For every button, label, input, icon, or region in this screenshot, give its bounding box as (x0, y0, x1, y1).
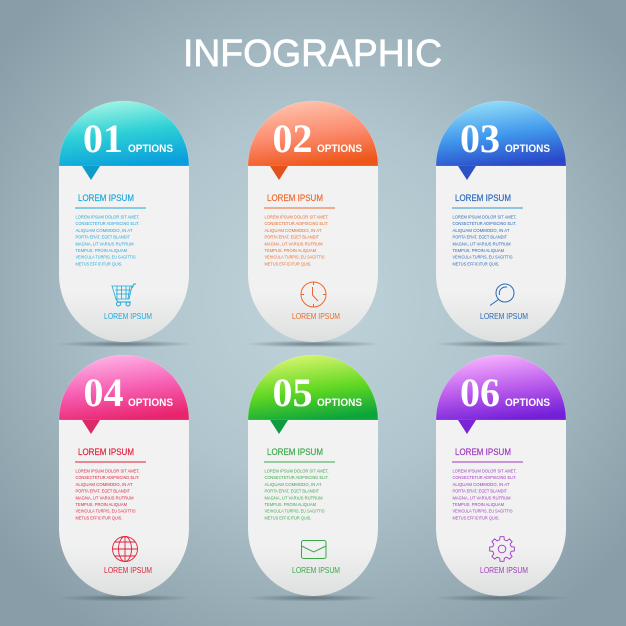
text block 06 (452, 468, 516, 520)
text block 01: METUS EFFICITUR QUIS. (76, 261, 122, 266)
title: INFOGRAPHIC (183, 33, 442, 75)
icon: clock (301, 282, 326, 307)
number 03: 03 (460, 116, 500, 161)
text block 01: LOREM IPSUM DOLOR SIT AMET, (76, 214, 140, 220)
text block 03 (452, 214, 516, 266)
pointer 04 (82, 420, 100, 434)
header 03 (436, 101, 566, 166)
text block 04: VEHICULA TURPIS, EU SAGITTIS (76, 509, 136, 514)
text block 03: TEMPUS. PROIN ALIQUAM (452, 248, 504, 253)
text block 04: ALIQUAM COMMODO, IN AT (76, 482, 133, 487)
header 04 (59, 355, 189, 420)
header 05 (248, 355, 378, 420)
panel: option 06 (433, 355, 569, 602)
heading 03: LOREM IPSUM (455, 193, 511, 204)
text block 02 (264, 214, 328, 266)
text block 02: TEMPUS. PROIN ALIQUAM (264, 248, 316, 253)
text block 06: VEHICULA TURPIS, EU SAGITTIS (452, 509, 512, 514)
text block 01: MAGNA, UT VARIUS RUTRUM (76, 241, 134, 246)
heading 02: LOREM IPSUM (267, 193, 323, 204)
panel: option 01 (56, 101, 192, 348)
text block 05: VEHICULA TURPIS, EU SAGITTIS (264, 509, 324, 514)
icon: shopping cart (112, 284, 136, 306)
text block 05 (264, 468, 328, 520)
text block 02: METUS EFFICITUR QUIS. (264, 261, 312, 266)
text block 06: TEMPUS. PROIN ALIQUAM (452, 502, 504, 507)
heading 06: LOREM IPSUM (455, 447, 511, 458)
panel: option 04 (56, 355, 192, 602)
text block 03: METUS EFFICITUR QUIS. (452, 261, 500, 266)
bottom label 05: LOREM IPSUM (292, 565, 340, 575)
text block 06: CONSECTETUR ADIPISCING ELIT. (452, 475, 516, 480)
panel: option 02 (245, 101, 381, 348)
number 04: 04 (84, 370, 124, 415)
text block 06: METUS EFFICITUR QUIS. (452, 515, 500, 520)
options label 02: OPTIONS (317, 143, 362, 155)
heading 04: LOREM IPSUM (78, 447, 134, 458)
text block 03: CONSECTETUR ADIPISCING ELIT. (452, 221, 516, 226)
text block 05: METUS EFFICITUR QUIS. (264, 515, 312, 520)
pointer 02 (270, 166, 288, 180)
text block 04: CONSECTETUR ADIPISCING ELIT. (76, 475, 140, 480)
number 01: 01 (83, 116, 123, 161)
text block 01: VEHICULA TURPIS, EU SAGITTIS (76, 255, 136, 260)
pointer 06 (458, 420, 476, 434)
text block 03: VEHICULA TURPIS, EU SAGITTIS (452, 255, 512, 260)
number 05: 05 (272, 370, 312, 415)
pointer 05 (270, 420, 288, 434)
icon: globe (112, 536, 138, 562)
pointer 01 (82, 166, 100, 180)
icon: gear (490, 537, 514, 561)
text block 02: VEHICULA TURPIS, EU SAGITTIS (264, 255, 324, 260)
bottom label 02: LOREM IPSUM (292, 311, 340, 321)
bottom label 06: LOREM IPSUM (480, 565, 528, 575)
heading 05: LOREM IPSUM (267, 447, 323, 458)
text block 06: ALIQUAM COMMODO, IN AT (452, 482, 510, 487)
text block 06: MAGNA, UT VARIUS RUTRUM (452, 495, 511, 500)
options label 05: OPTIONS (317, 397, 362, 409)
number 06: 06 (460, 370, 500, 415)
text block 04: LOREM IPSUM DOLOR SIT AMET, (76, 468, 140, 474)
text block 05: PORTA ERAT, EGET BLANDIT (264, 489, 319, 494)
header 02 (248, 101, 378, 166)
text block 05: MAGNA, UT VARIUS RUTRUM (264, 495, 323, 500)
pointer 03 (458, 166, 476, 180)
text block 01: CONSECTETUR ADIPISCING ELIT. (76, 221, 140, 226)
header 06 (436, 355, 566, 420)
text block 03: ALIQUAM COMMODO, IN AT (452, 228, 510, 233)
icon: magnifier (490, 284, 514, 306)
text block 02: ALIQUAM COMMODO, IN AT (264, 228, 322, 233)
panel: option 03 (433, 101, 569, 348)
text block 02: LOREM IPSUM DOLOR SIT AMET, (264, 214, 328, 220)
header 01 (59, 101, 189, 166)
text block 02: MAGNA, UT VARIUS RUTRUM (264, 241, 323, 246)
bottom label 01: LOREM IPSUM (104, 311, 152, 321)
text block 06: LOREM IPSUM DOLOR SIT AMET, (452, 468, 516, 474)
heading 01: LOREM IPSUM (78, 193, 134, 204)
panel: option 05 (245, 355, 381, 602)
text block 03: PORTA ERAT, EGET BLANDIT (452, 235, 507, 240)
text block 05: LOREM IPSUM DOLOR SIT AMET, (264, 468, 328, 474)
text block 03: MAGNA, UT VARIUS RUTRUM (452, 241, 511, 246)
text block 04: MAGNA, UT VARIUS RUTRUM (76, 495, 134, 500)
bottom label 03: LOREM IPSUM (480, 311, 528, 321)
options label 06: OPTIONS (505, 397, 550, 409)
text block 01: ALIQUAM COMMODO, IN AT (76, 228, 133, 233)
text block 01 (76, 214, 140, 266)
options label 04: OPTIONS (128, 397, 173, 409)
text block 01: TEMPUS. PROIN ALIQUAM (76, 248, 127, 253)
text block 04: PORTA ERAT, EGET BLANDIT (76, 489, 130, 494)
text block 04 (76, 468, 140, 520)
text block 06: PORTA ERAT, EGET BLANDIT (452, 489, 507, 494)
text block 04: METUS EFFICITUR QUIS. (76, 515, 122, 520)
text block 05: ALIQUAM COMMODO, IN AT (264, 482, 322, 487)
options label 03: OPTIONS (505, 143, 550, 155)
text block 02: PORTA ERAT, EGET BLANDIT (264, 235, 319, 240)
bottom label 04: LOREM IPSUM (104, 565, 152, 575)
text block 05: CONSECTETUR ADIPISCING ELIT. (264, 475, 328, 480)
text block 05: TEMPUS. PROIN ALIQUAM (264, 502, 316, 507)
text block 02: CONSECTETUR ADIPISCING ELIT. (264, 221, 328, 226)
text block 03: LOREM IPSUM DOLOR SIT AMET, (452, 214, 516, 220)
number 02: 02 (272, 116, 312, 161)
icon: envelope (302, 540, 326, 558)
text block 01: PORTA ERAT, EGET BLANDIT (76, 235, 130, 240)
text block 04: TEMPUS. PROIN ALIQUAM (76, 502, 127, 507)
options label 01: OPTIONS (128, 143, 173, 155)
